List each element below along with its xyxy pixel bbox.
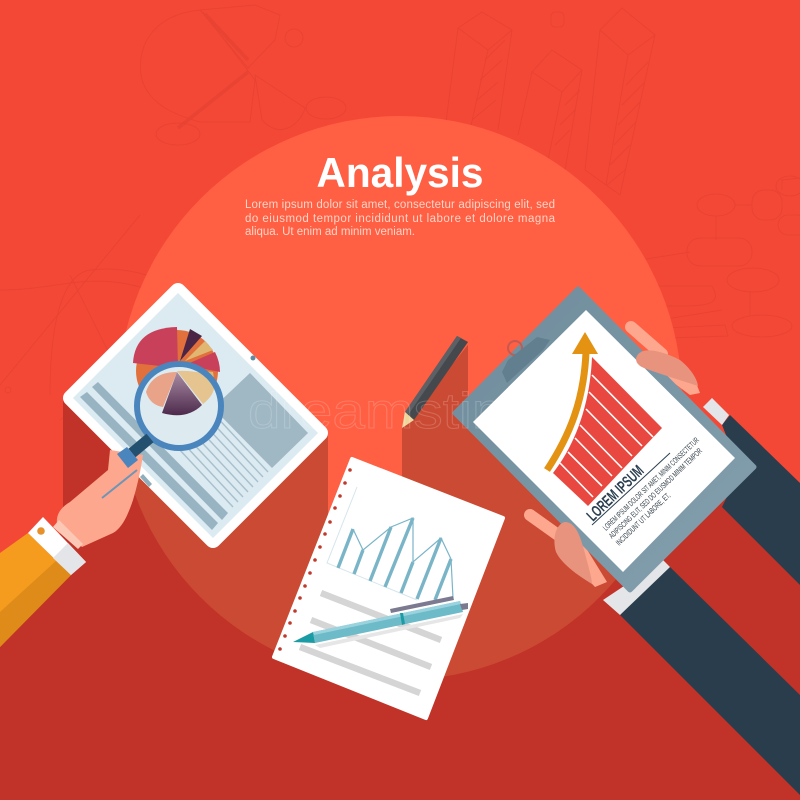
- tablet pie chart: [133, 327, 220, 412]
- sketch: line graph: [0, 215, 200, 420]
- cuff shade: [53, 543, 86, 575]
- pen band: [400, 613, 405, 625]
- tablet camera: [250, 356, 256, 360]
- main circle: [118, 116, 682, 680]
- clip ring: [508, 341, 522, 355]
- wrist: [53, 520, 83, 549]
- tablet body: [71, 291, 320, 540]
- clipboard body text: ADIPISCING ELIT, SED DO EIUSMOD MINIM TEMPOR: [607, 446, 704, 540]
- chart trend line: [353, 518, 453, 598]
- pencil tip: [402, 412, 414, 428]
- growth bars: [553, 357, 662, 506]
- hands in front of clipboard: [554, 350, 698, 584]
- growth arrow: [547, 332, 598, 470]
- pen end: [460, 603, 468, 610]
- background sketches: [0, 5, 800, 420]
- magnified salmon slice: [146, 372, 177, 407]
- lens ring: [137, 364, 221, 448]
- pen tip: [293, 632, 315, 643]
- lower palm: [560, 530, 607, 587]
- sketch: bar columns: [446, 8, 655, 195]
- clipboard clip: [502, 337, 550, 383]
- long shadow inside circle: [135, 345, 616, 676]
- pencil: [402, 336, 468, 428]
- upper cuff: [703, 398, 729, 425]
- tablet home button: [140, 474, 152, 487]
- upper thumb: [636, 350, 698, 386]
- grip strip: [102, 470, 137, 498]
- lower cuff: [603, 560, 670, 615]
- arrow shaft: [547, 352, 586, 470]
- left sleeve shade: [0, 560, 71, 647]
- clipboard body text: LOREM IPSUM DOLOR SIT AMET, MINIM CONSECTETUR: [601, 436, 701, 532]
- clipboard sheet: [473, 310, 735, 572]
- cuff button: [37, 527, 45, 535]
- magnified tan slice: [177, 371, 214, 404]
- tablet sidebar bars: [80, 382, 228, 530]
- page sheet: [274, 459, 503, 718]
- lower sleeve: [620, 565, 800, 795]
- left sleeve: [0, 533, 71, 647]
- page text bars: [300, 593, 441, 693]
- arrow head: [572, 332, 598, 354]
- lower finger: [530, 515, 565, 540]
- sketch: flowchart: [640, 176, 800, 338]
- watermark: dreamstime: [248, 383, 553, 439]
- pen clip: [390, 596, 454, 613]
- clipboard board: [455, 289, 754, 590]
- intro text: Lorem ipsum dolor sit amet, consectetur adipiscing elit, sed: [245, 199, 555, 211]
- pen highlight: [313, 601, 461, 635]
- clipboard body text: [601, 436, 704, 547]
- pencil highlight: [405, 336, 461, 415]
- right sleeves and hands behind clipboard: [530, 327, 800, 795]
- sketch: pie chart: [140, 5, 346, 145]
- tablet text lines: [178, 413, 268, 507]
- upper palm: [650, 345, 700, 395]
- clipboard heading: LOREM IPSUM: [584, 463, 648, 525]
- heading rule: [592, 453, 670, 525]
- tablet screen: [73, 293, 318, 538]
- chart axes: [327, 487, 417, 600]
- intro text: do eiusmod tempor incididunt ut labore et dolore magna: [245, 213, 556, 225]
- upper finger: [631, 327, 662, 354]
- magnified purple slice: [162, 372, 202, 415]
- left cuff: [28, 517, 86, 575]
- handle: [132, 438, 150, 453]
- long shadow: [0, 300, 800, 800]
- grip: [117, 447, 138, 468]
- left hand: [57, 450, 143, 547]
- lens: [137, 364, 221, 448]
- clipboard: [455, 289, 754, 590]
- bar dividers: [560, 375, 653, 497]
- chart bars: [338, 518, 451, 600]
- tablet image block: [213, 373, 308, 468]
- pen: [293, 596, 468, 648]
- pen body: [313, 601, 463, 643]
- notebook page: [274, 459, 503, 718]
- intro text: aliqua. Ut enim ad minim veniam.: [245, 226, 415, 238]
- clipboard body text: INCIDIDUNT UT LABORE, ET,: [614, 491, 672, 547]
- lower thumb: [554, 522, 592, 584]
- page holes: [278, 468, 352, 651]
- hand with magnifier: [0, 364, 221, 647]
- intro text: [245, 199, 556, 238]
- upper sleeve: [722, 415, 800, 585]
- pen shadow: [315, 614, 463, 648]
- tablet: [71, 291, 320, 540]
- clip plate: [502, 337, 550, 383]
- heading: Analysis: [316, 149, 484, 196]
- magnifier: [102, 364, 221, 498]
- pencil body: [405, 336, 468, 420]
